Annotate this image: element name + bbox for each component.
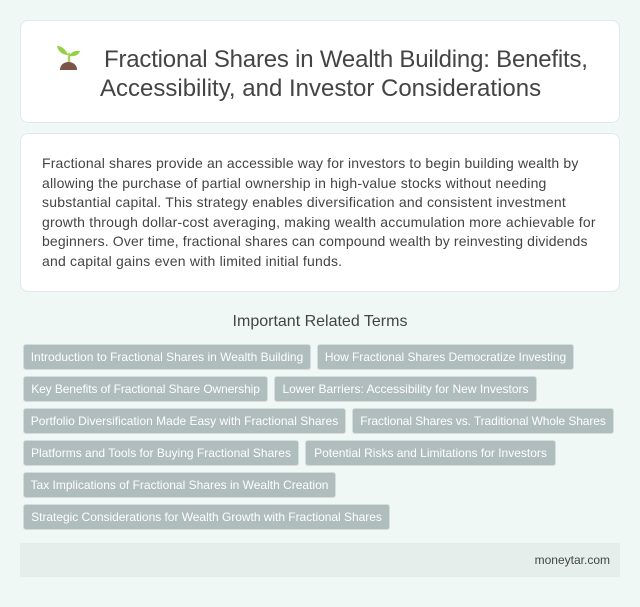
- tag list: Introduction to Fractional Shares in Wealth Building: [31, 350, 303, 364]
- tag list: Key Benefits of Fractional Share Ownership: [31, 382, 260, 396]
- panel: summary paragraph: [20, 133, 620, 292]
- tag list: Strategic Considerations for Wealth Growth with Fractional Shares: [31, 510, 382, 524]
- paragraph text: Fractional shares provide an accessible way for investors to begin building wealth by: [42, 155, 578, 171]
- panel: title card: [20, 20, 620, 123]
- footer source text: moneytar.com: [535, 553, 610, 567]
- tag list: Tax Implications of Fractional Shares in Wealth Creation: [31, 478, 328, 492]
- title text: [100, 46, 588, 102]
- footer bar: [20, 543, 620, 577]
- tag list: [23, 344, 614, 530]
- tag list: Platforms and Tools for Buying Fractional Shares: [31, 446, 291, 460]
- paragraph text: [42, 155, 596, 269]
- paragraph text: beginners. Over time, fractional shares can compound wealth by reinvesting dividends: [42, 233, 588, 249]
- tag list: Lower Barriers: Accessibility for New Investors: [282, 382, 529, 396]
- heading: related terms: Important Related Terms: [233, 313, 407, 330]
- tag list: How Fractional Shares Democratize Investing: [325, 350, 566, 364]
- paragraph text: substantial capital. This strategy enables diversification and consistent investment: [42, 194, 566, 210]
- tag list: Potential Risks and Limitations for Investors: [314, 446, 547, 460]
- title text: Accessibility, and Investor Considerations: [100, 75, 541, 102]
- title text: Fractional Shares in Wealth Building: Benefits,: [104, 46, 588, 73]
- tag list: Fractional Shares vs. Traditional Whole Shares: [360, 414, 606, 428]
- paragraph text: growth through dollar-cost averaging, making wealth accumulation more achievable for: [42, 214, 596, 230]
- tag list: Portfolio Diversification Made Easy with Fractional Shares: [31, 414, 338, 428]
- icon: seedling: [57, 46, 80, 70]
- paragraph text: allowing the purchase of partial ownership in high-value stocks without needing: [42, 174, 547, 190]
- paragraph text: and capital gains even with limited initial funds.: [42, 252, 342, 268]
